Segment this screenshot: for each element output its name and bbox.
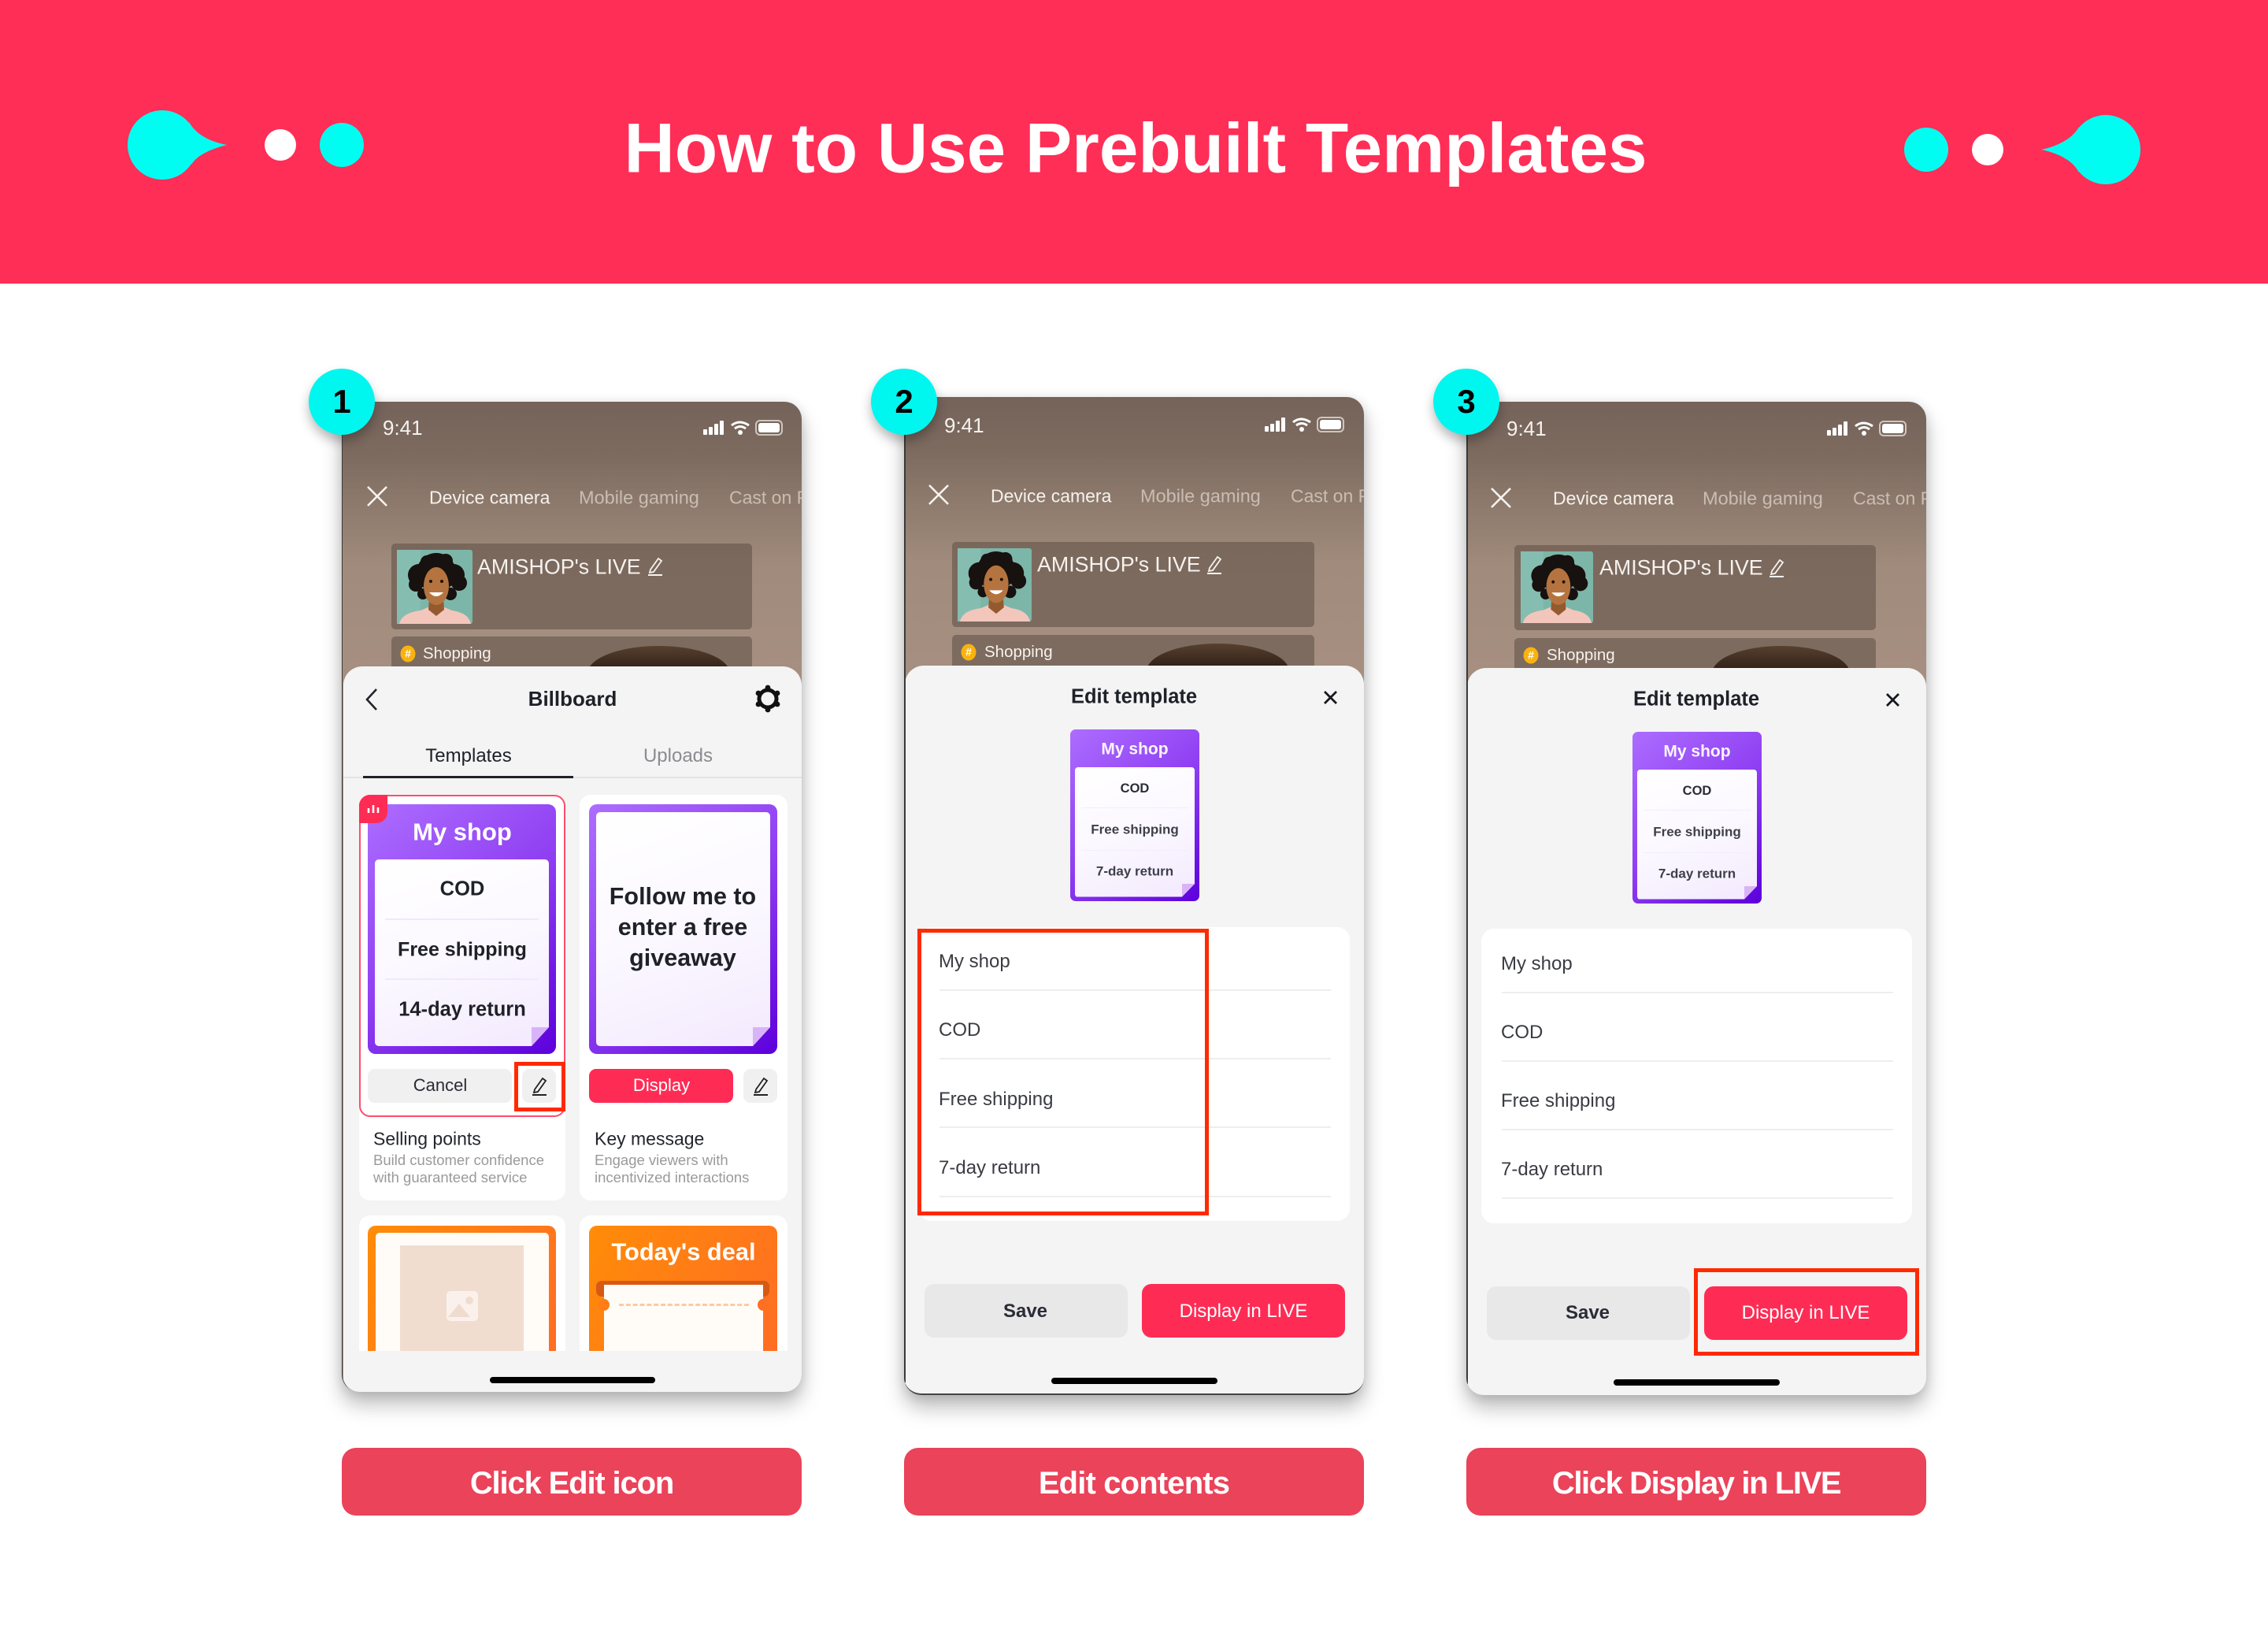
shopping topic card bbox=[391, 636, 752, 684]
card description: Key message bbox=[595, 1128, 704, 1148]
tabs bbox=[343, 745, 802, 778]
editable field list: 7-day return bbox=[1501, 1159, 1603, 1180]
cancel button bbox=[368, 1069, 512, 1103]
image placeholder icon bbox=[447, 1291, 478, 1321]
status icons bbox=[703, 420, 783, 436]
preview paper: Follow me to bbox=[610, 883, 756, 910]
editable field list bbox=[1481, 929, 1912, 1223]
caption: Click Edit icon: Click Edit icon bbox=[470, 1466, 673, 1501]
editable field list: Free shipping bbox=[1501, 1090, 1615, 1111]
sheet title: Edit template bbox=[1071, 685, 1197, 707]
source tabs: Mobile gaming bbox=[1140, 485, 1261, 506]
edit button bbox=[522, 1069, 556, 1103]
mini template preview: COD bbox=[1683, 784, 1711, 798]
tabs: Uploads bbox=[643, 745, 713, 766]
editable field list: 7-day return bbox=[939, 1157, 1040, 1178]
close icon bbox=[1324, 691, 1337, 704]
source tabs: Device camera bbox=[429, 487, 550, 507]
source tabs: Mobile gaming bbox=[1703, 488, 1823, 508]
purple template preview bbox=[589, 804, 777, 1054]
sheet title: Edit template bbox=[1633, 688, 1759, 710]
pencil icon bbox=[1207, 556, 1222, 574]
status time: 9:41 bbox=[944, 414, 984, 437]
popular tag bbox=[359, 795, 387, 823]
hashtag icon: # bbox=[1528, 649, 1534, 662]
sheet title: Billboard bbox=[528, 687, 617, 711]
preview paper: COD bbox=[440, 878, 484, 900]
page fold bbox=[753, 1027, 770, 1046]
mini template preview: COD bbox=[1121, 781, 1149, 796]
hashtag icon bbox=[1523, 648, 1539, 663]
deal heading: Today's deal bbox=[611, 1238, 756, 1266]
tabs: Templates bbox=[425, 745, 512, 766]
editable field list: Free shipping bbox=[939, 1089, 1053, 1110]
card description: Engage viewers with bbox=[595, 1152, 728, 1168]
mini template preview: Free shipping bbox=[1091, 822, 1179, 837]
home indicator bbox=[490, 1377, 655, 1383]
preview paper: giveaway bbox=[629, 944, 736, 971]
purple template preview bbox=[368, 804, 556, 1054]
page fold bbox=[532, 1027, 549, 1046]
mini template preview bbox=[1070, 729, 1199, 901]
step badge 3 bbox=[1433, 369, 1499, 435]
phone 3: Display in LIVE step bbox=[1466, 402, 1926, 1395]
source tabs: Device camera bbox=[991, 485, 1111, 506]
hair behind sheet bbox=[1712, 646, 1850, 701]
save button: Save bbox=[1003, 1301, 1047, 1322]
back chevron bbox=[365, 688, 377, 711]
step badge 3: 3 bbox=[1457, 383, 1476, 420]
status time: 9:41 bbox=[1506, 417, 1547, 440]
status icons bbox=[1265, 417, 1344, 432]
step badge 2: 2 bbox=[895, 383, 914, 420]
caption: Click Edit icon bbox=[342, 1448, 802, 1516]
preview paper bbox=[375, 859, 549, 1046]
source tabs: Mobile gaming bbox=[579, 487, 699, 507]
hashtag icon: # bbox=[405, 648, 411, 660]
editable field list: COD bbox=[939, 1019, 980, 1041]
display in LIVE button bbox=[1142, 1284, 1345, 1338]
decoration: left speech drop and dots bbox=[128, 110, 364, 180]
red highlight around fields bbox=[917, 929, 1209, 1215]
topic label: Shopping bbox=[1547, 646, 1615, 664]
decoration: right speech drop and dots bbox=[1904, 115, 2140, 184]
caption: Edit contents bbox=[904, 1448, 1364, 1516]
status time: 9:41 bbox=[383, 416, 423, 440]
card description bbox=[373, 1128, 544, 1186]
LIVE title card bbox=[391, 544, 752, 629]
hair behind sheet bbox=[1147, 644, 1289, 699]
source tabs bbox=[991, 485, 1364, 506]
shopping topic card bbox=[1514, 638, 1876, 685]
shopping topic card bbox=[952, 635, 1314, 682]
stream title: AMISHOP's LIVE bbox=[1037, 553, 1201, 577]
profile photo bbox=[397, 550, 472, 624]
step badge 2 bbox=[871, 369, 937, 435]
template card: selling points bbox=[359, 795, 565, 1200]
preview paper: enter a free bbox=[618, 914, 747, 941]
display in LIVE button: Display in LIVE bbox=[1742, 1302, 1870, 1323]
display in LIVE button bbox=[1704, 1286, 1907, 1340]
caption: Click Display in LIVE: Click Display in LIVE bbox=[1552, 1466, 1840, 1501]
mini template preview: 7-day return bbox=[1658, 866, 1736, 881]
hashtag icon bbox=[961, 644, 976, 660]
bottom sheet: Edit template bbox=[1467, 668, 1926, 1395]
card description: incentivized interactions bbox=[595, 1169, 749, 1186]
hashtag icon: # bbox=[965, 646, 972, 659]
red highlight around display button bbox=[1694, 1268, 1919, 1356]
mini template preview: My shop bbox=[1663, 742, 1731, 761]
status icons bbox=[1827, 421, 1907, 436]
source tabs bbox=[429, 487, 802, 507]
topic label: Shopping bbox=[423, 644, 491, 662]
profile photo bbox=[958, 548, 1032, 622]
clipped lower template row bbox=[359, 1215, 788, 1351]
save button bbox=[1487, 1286, 1690, 1340]
close icon bbox=[1886, 693, 1899, 707]
caption: Edit contents: Edit contents bbox=[1039, 1466, 1229, 1501]
template card: image bbox=[359, 1215, 565, 1397]
card description: Selling points bbox=[373, 1128, 481, 1148]
editable field list: My shop bbox=[939, 951, 1010, 972]
LIVE title card bbox=[952, 542, 1314, 627]
red highlight around edit icon bbox=[514, 1062, 565, 1111]
preview paper: Free shipping bbox=[398, 939, 527, 961]
card description bbox=[595, 1128, 749, 1186]
mini template preview: 7-day return bbox=[1096, 863, 1173, 879]
bottom sheet: Edit template bbox=[905, 666, 1364, 1393]
display button: Display bbox=[633, 1075, 690, 1095]
mini template preview: Free shipping bbox=[1653, 824, 1741, 840]
editable field list: COD bbox=[1501, 1022, 1543, 1043]
template card: today's deal bbox=[580, 1215, 788, 1397]
preview paper: 14-day return bbox=[398, 998, 526, 1020]
pencil icon bbox=[1770, 559, 1784, 577]
phone 1: Billboard templates screen bbox=[342, 402, 802, 1392]
display button bbox=[589, 1069, 733, 1103]
save button bbox=[925, 1284, 1128, 1338]
hair behind sheet bbox=[587, 646, 730, 701]
header banner bbox=[0, 0, 2268, 284]
step badge 1: 1 bbox=[332, 383, 351, 420]
selected outline bbox=[359, 795, 565, 1117]
source tabs bbox=[1553, 488, 1926, 509]
close icon bbox=[1491, 488, 1511, 508]
close icon bbox=[367, 486, 387, 507]
phone 2: Edit template screen bbox=[904, 397, 1364, 1395]
editable field list: My shop bbox=[1501, 953, 1573, 974]
template card: key message bbox=[580, 795, 788, 1200]
home indicator bbox=[1051, 1378, 1217, 1384]
stream title: AMISHOP's LIVE bbox=[1599, 556, 1763, 580]
home indicator bbox=[1614, 1379, 1780, 1386]
edit button bbox=[743, 1069, 777, 1103]
cancel button: Cancel bbox=[413, 1075, 467, 1095]
preview heading: My shop bbox=[413, 818, 512, 846]
topic label: Shopping bbox=[984, 643, 1053, 661]
card description: Build customer confidence bbox=[373, 1152, 544, 1168]
step badge 1 bbox=[309, 369, 375, 435]
preview paper bbox=[596, 812, 770, 1046]
source tabs: Device camera bbox=[1553, 488, 1673, 509]
save button: Save bbox=[1566, 1302, 1610, 1323]
editable field list bbox=[919, 927, 1350, 1221]
mini template preview bbox=[1632, 732, 1762, 904]
profile photo bbox=[1521, 551, 1593, 623]
LIVE title card bbox=[1514, 545, 1876, 630]
hashtag icon bbox=[400, 646, 416, 662]
title: How to Use Prebuilt Templates bbox=[624, 109, 1647, 187]
caption: Click Display in LIVE bbox=[1466, 1448, 1926, 1516]
settings gear icon bbox=[756, 685, 780, 712]
display in LIVE button: Display in LIVE bbox=[1180, 1301, 1307, 1322]
stream title: AMISHOP's LIVE bbox=[477, 555, 641, 579]
bottom sheet: Billboard bbox=[343, 666, 802, 1392]
pencil icon bbox=[648, 558, 663, 576]
mini template preview: My shop bbox=[1101, 740, 1169, 758]
card description: with guaranteed service bbox=[373, 1169, 527, 1186]
close icon bbox=[928, 484, 949, 505]
